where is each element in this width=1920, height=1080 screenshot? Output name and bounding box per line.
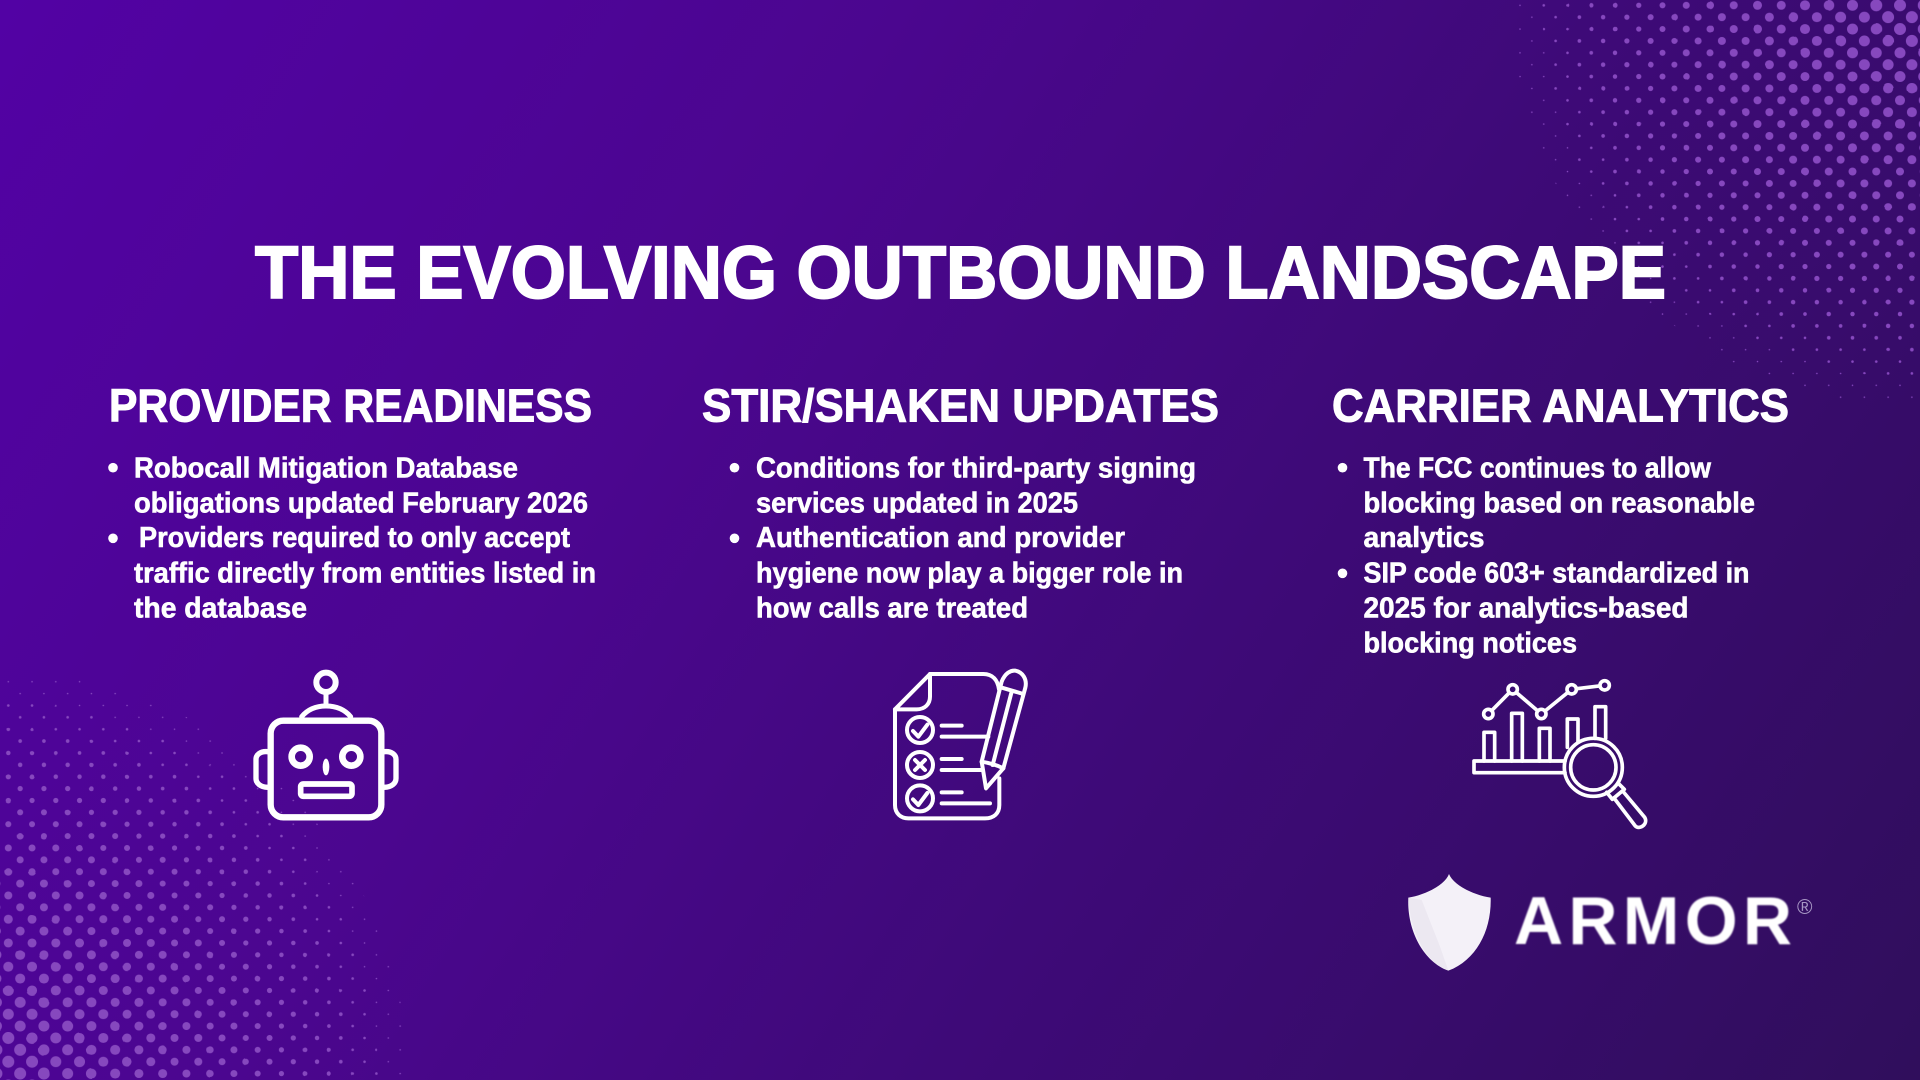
wordmark: ARMOR [1514,883,1792,959]
halftone dots: top right corner [1512,0,1920,408]
bullet list: provider readiness: the database [134,592,307,624]
registered mark: ® [1797,896,1813,919]
bullet list: carrier analytics: analytics [1364,522,1484,554]
heading: stir/shaken updates: STIR/SHAKEN UPDATES [702,380,1219,432]
bullet list: stir/shaken [730,452,1196,624]
bullet list: stir/shaken: Authentication and provider [756,522,1125,554]
bullet list: carrier analytics: The FCC continues to allow [1364,452,1712,484]
bullet list: provider readiness: Providers required to only accept [139,522,571,554]
bullet list: carrier analytics: blocking based on reasonable [1364,487,1755,519]
icon: analytics chart with magnifier [1474,681,1646,827]
bullet list: provider readiness [108,452,596,624]
bullet list: carrier analytics: blocking notices [1364,627,1577,659]
icon: checklist with pencil [895,671,1026,818]
panel: stir/shaken updates [702,380,1219,818]
bullet list: provider readiness: Robocall Mitigation Database [134,452,518,484]
icon: shield [1408,874,1491,971]
bullet list: stir/shaken: how calls are treated [756,592,1028,624]
bullet list: carrier analytics [1338,452,1755,659]
panel: provider readiness [108,380,596,817]
bullet list: stir/shaken: Conditions for third-party signing [756,452,1196,484]
logo: armor [1408,874,1813,971]
bullet list: carrier analytics: 2025 for analytics-based [1364,592,1688,624]
title: THE EVOLVING OUTBOUND LANDSCAPE [255,231,1666,314]
bullet list: stir/shaken: hygiene now play a bigger role in [756,557,1183,589]
panel: carrier analytics [1332,380,1789,827]
bullet list: carrier analytics: SIP code 603+ standardized in [1364,557,1750,589]
icon: robot [256,673,396,817]
heading: provider readiness: PROVIDER READINESS [109,380,592,432]
bullet list: provider readiness: traffic directly from entities listed in [134,557,596,589]
halftone dots: bottom left corner [0,672,408,1080]
bullet list: stir/shaken: services updated in 2025 [756,487,1078,519]
heading: carrier analytics: CARRIER ANALYTICS [1332,380,1789,432]
bullet list: provider readiness: obligations updated February 2026 [134,487,588,519]
